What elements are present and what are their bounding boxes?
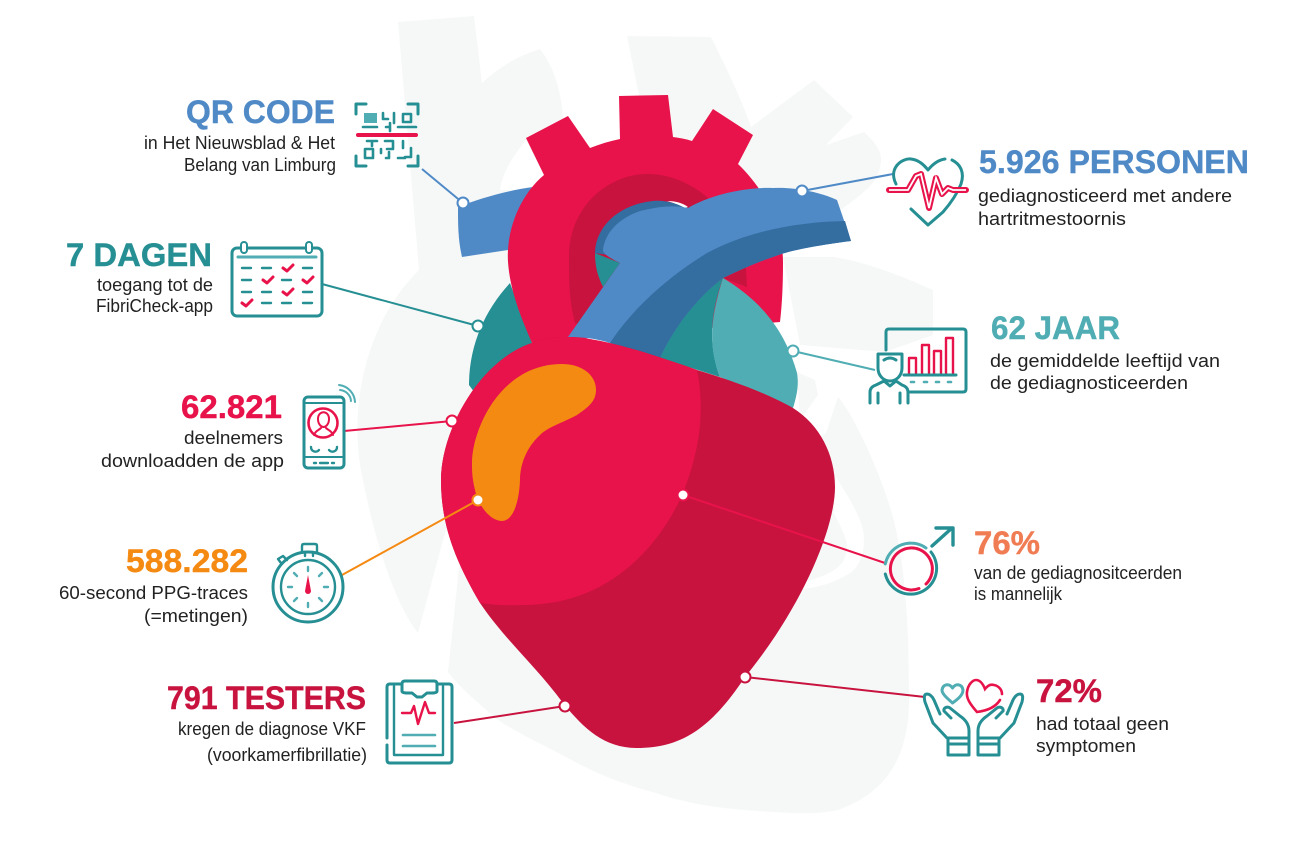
aorta arch xyxy=(508,95,783,343)
ventricle bright red xyxy=(441,337,701,605)
anatomical heart illustration xyxy=(441,95,851,748)
pulmonary artery blue xyxy=(568,188,851,358)
stat: 588.282 xyxy=(59,543,343,626)
stat: 72%: had totaal geen xyxy=(1036,714,1169,734)
icon: male symbol xyxy=(885,528,953,594)
stat: 76%: 76% xyxy=(974,525,1040,561)
stat: 62 jaar xyxy=(870,310,1220,403)
inner teal sliver xyxy=(595,253,620,287)
ventricle dark red xyxy=(441,337,835,748)
right atrium light teal xyxy=(712,278,798,408)
stat: 62 jaar: 62 JAAR xyxy=(991,310,1120,346)
icon: clipboard xyxy=(387,681,452,763)
stat: 76%: van de gediagnositceerden xyxy=(974,563,1182,583)
stat: 588.282: 588.282 xyxy=(126,543,248,579)
left pulmonary vessel xyxy=(458,187,533,257)
stat: QR code: QR CODE xyxy=(186,94,335,130)
stat: 62.821: deelnemers xyxy=(184,428,283,448)
stat: 62 jaar: de gemiddelde leeftijd van xyxy=(990,351,1220,371)
stat: QR code: Belang van Limburg xyxy=(184,155,336,175)
right atrium dark teal xyxy=(660,278,723,377)
white gap sliver xyxy=(667,201,688,208)
inner dark blue vessel xyxy=(595,201,688,260)
stat: 7 dagen xyxy=(66,237,322,316)
connector nodes xyxy=(446,186,808,712)
icon: hands with hearts xyxy=(924,680,1023,755)
icon: stopwatch xyxy=(273,544,343,622)
icon: phone xyxy=(304,385,355,468)
left atrium teal xyxy=(469,283,532,400)
icon: heart with ECG xyxy=(889,159,966,225)
stat: 5.926 personen: 5.926 PERSONEN xyxy=(979,144,1249,180)
stat: 791 testers xyxy=(167,680,452,765)
stat: 76% xyxy=(885,525,1182,604)
stat: 7 dagen: toegang tot de xyxy=(97,275,213,295)
stat: 62.821: 62.821 xyxy=(181,389,282,425)
stat: 7 dagen: 7 DAGEN xyxy=(66,237,212,273)
stat: 791 testers: 791 TESTERS xyxy=(167,680,366,716)
icon: QR scanner xyxy=(356,104,418,166)
stat: 72% xyxy=(924,673,1169,756)
background ghost heart silhouette xyxy=(357,16,933,813)
stat: 588.282: 60-second PPG-traces xyxy=(59,583,248,603)
connector lines xyxy=(322,169,925,723)
pulmonary artery shadow xyxy=(610,221,851,358)
icon: presenter with bar chart xyxy=(870,329,966,403)
stat: 5.926 personen: gediagnosticeerd met andere xyxy=(978,186,1232,206)
stat: 791 testers: (voorkamerfibrillatie) xyxy=(207,745,367,765)
stat: 72%: symptomen xyxy=(1036,736,1136,756)
stat: 62.821 xyxy=(101,385,355,471)
stat: QR code: in Het Nieuwsblad & Het xyxy=(144,133,335,153)
icon: calendar xyxy=(232,242,322,316)
aorta inner shadow xyxy=(569,174,747,358)
stat: 72%: 72% xyxy=(1036,673,1102,709)
stat: 5.926 personen: hartritmestoornis xyxy=(978,209,1126,229)
stat: 5.926 personen xyxy=(889,144,1249,229)
stat: 76%: is mannelijk xyxy=(974,584,1063,604)
stat: QR code xyxy=(144,94,418,175)
stat: 62 jaar: de gediagnosticeerden xyxy=(990,373,1188,393)
stat: 791 testers: kregen de diagnose VKF xyxy=(178,719,366,739)
stat: 588.282: (=metingen) xyxy=(144,606,248,626)
stat: 62.821: downloadden de app xyxy=(101,451,284,471)
stat: 7 dagen: FibriCheck-app xyxy=(96,296,213,316)
orange chamber xyxy=(472,364,596,521)
